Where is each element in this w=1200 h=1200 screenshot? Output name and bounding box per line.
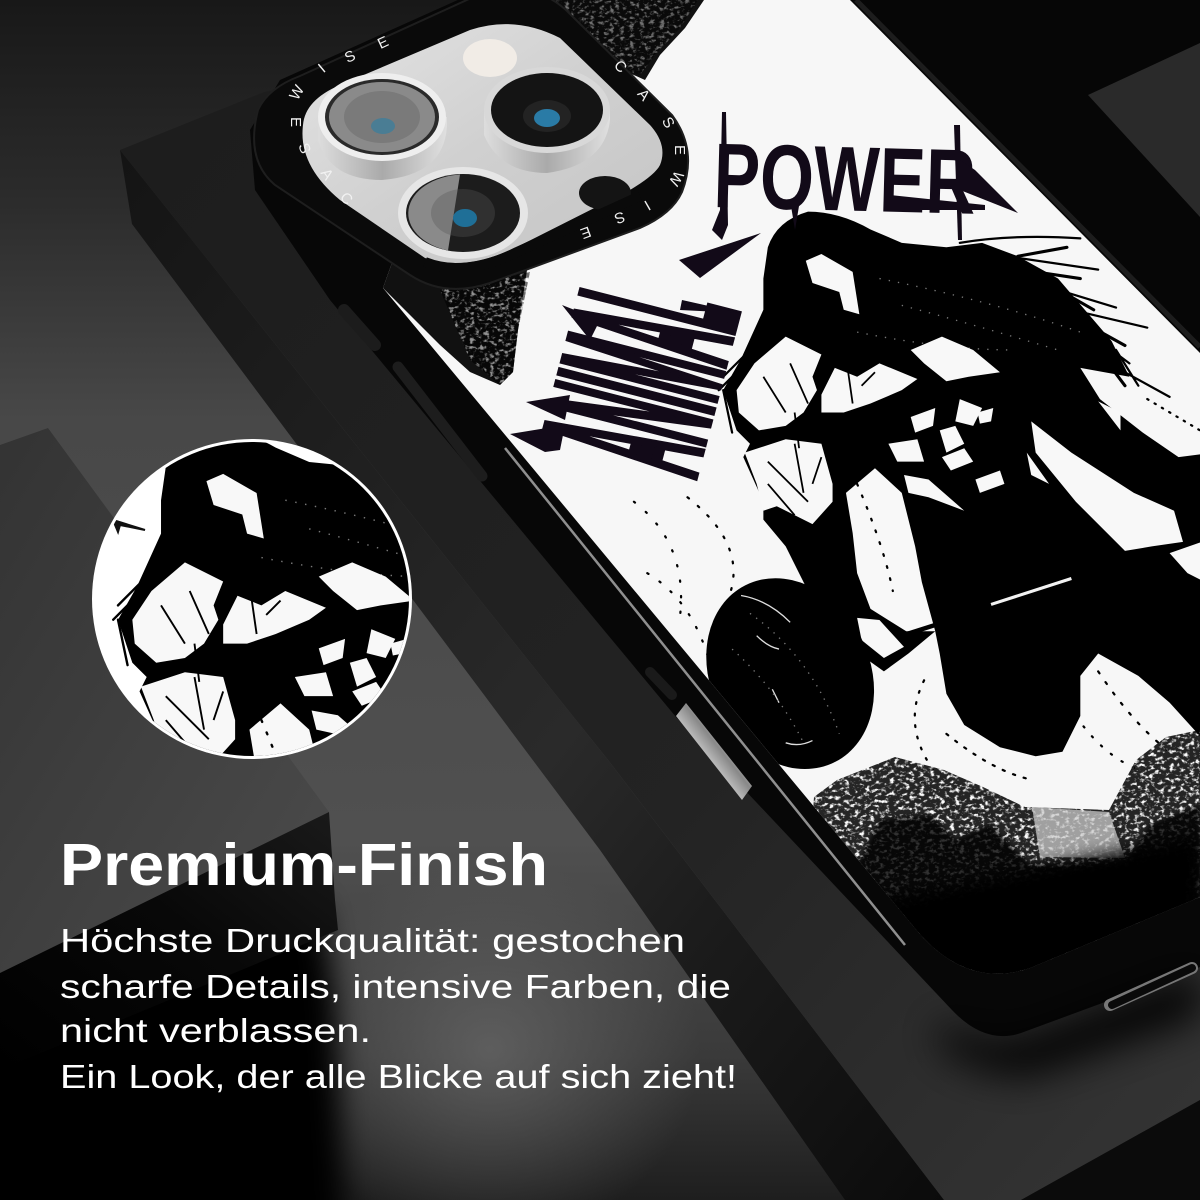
step top face	[0, 428, 329, 973]
frame highlight	[505, 448, 905, 945]
bottom port	[1110, 968, 1192, 1005]
silver button	[676, 703, 752, 800]
top grunge texture	[554, 0, 704, 80]
ring brand text: CASEWISE right: W	[665, 168, 687, 189]
right grey block	[1088, 43, 1200, 217]
art background	[383, 0, 1200, 974]
microphone cutout	[579, 176, 631, 210]
ring brand text: CASEWISE right	[578, 57, 688, 242]
ring brand text: CASEWISE left: W	[286, 82, 308, 103]
ring brand text: CASEWISE right: A	[634, 86, 653, 104]
camera glass	[302, 24, 662, 263]
lens: upper right	[484, 67, 610, 173]
ring brand text: CASEWISE left	[286, 33, 391, 209]
shadow under phone	[940, 970, 1200, 1075]
heading: Premium-Finish	[60, 832, 548, 898]
ring brand text: CASEWISE right: S	[658, 114, 678, 131]
lens: bottom	[398, 167, 528, 259]
step front face	[0, 812, 338, 1070]
ring band overlay	[425, 196, 640, 268]
camera module	[254, 0, 688, 289]
ring brand text: CASEWISE left: I	[315, 61, 329, 76]
fighter silhouette	[634, 212, 1200, 798]
side port	[344, 310, 375, 345]
ring brand text: CASEWISE left: S	[295, 141, 314, 156]
flash	[463, 39, 517, 77]
body text: scharfe Details, intensive Farben, die	[60, 969, 731, 1006]
phone case body	[250, 0, 1200, 1075]
ring brand text: CASEWISE right: C	[610, 57, 630, 77]
right frame edge	[856, 0, 1200, 347]
ring brand text: CASEWISE left: E	[375, 33, 391, 53]
ring brand text: CASEWISE right: S	[612, 208, 627, 227]
side button	[398, 367, 482, 476]
ring brand text: CASEWISE left: E	[287, 117, 304, 127]
ring brand text: CASEWISE right: E	[671, 145, 688, 155]
body text: Höchste Druckqualität: gestochen	[60, 923, 685, 960]
lower-left grunge texture	[383, 264, 530, 385]
ring brand text: CASEWISE left: A	[317, 165, 337, 183]
body text: nicht verblassen.	[60, 1013, 371, 1050]
ring brand text: CASEWISE left: S	[342, 47, 358, 67]
ground grunge	[813, 730, 1200, 974]
ring brand text: CASEWISE right: I	[641, 196, 653, 213]
ring brand text: CASEWISE left: C	[336, 189, 356, 209]
action slot	[650, 672, 672, 695]
printed artwork	[383, 0, 1200, 974]
lens: upper left	[318, 73, 447, 180]
camera ring	[254, 0, 688, 289]
block wall	[120, 150, 944, 1200]
ring brand text: CASEWISE right: E	[578, 223, 593, 242]
inset circle: detail zoom	[92, 439, 412, 759]
ANIMAL lettering: ANIMAL	[497, 260, 782, 491]
lower right shadow	[1021, 1100, 1200, 1200]
right dark backdrop	[850, 0, 1200, 400]
POWER lettering: POWER	[712, 125, 977, 234]
body text	[60, 923, 737, 1096]
body text: Ein Look, der alle Blicke auf sich zieht!	[60, 1059, 737, 1096]
step front face, soft lower edge	[0, 900, 345, 1200]
